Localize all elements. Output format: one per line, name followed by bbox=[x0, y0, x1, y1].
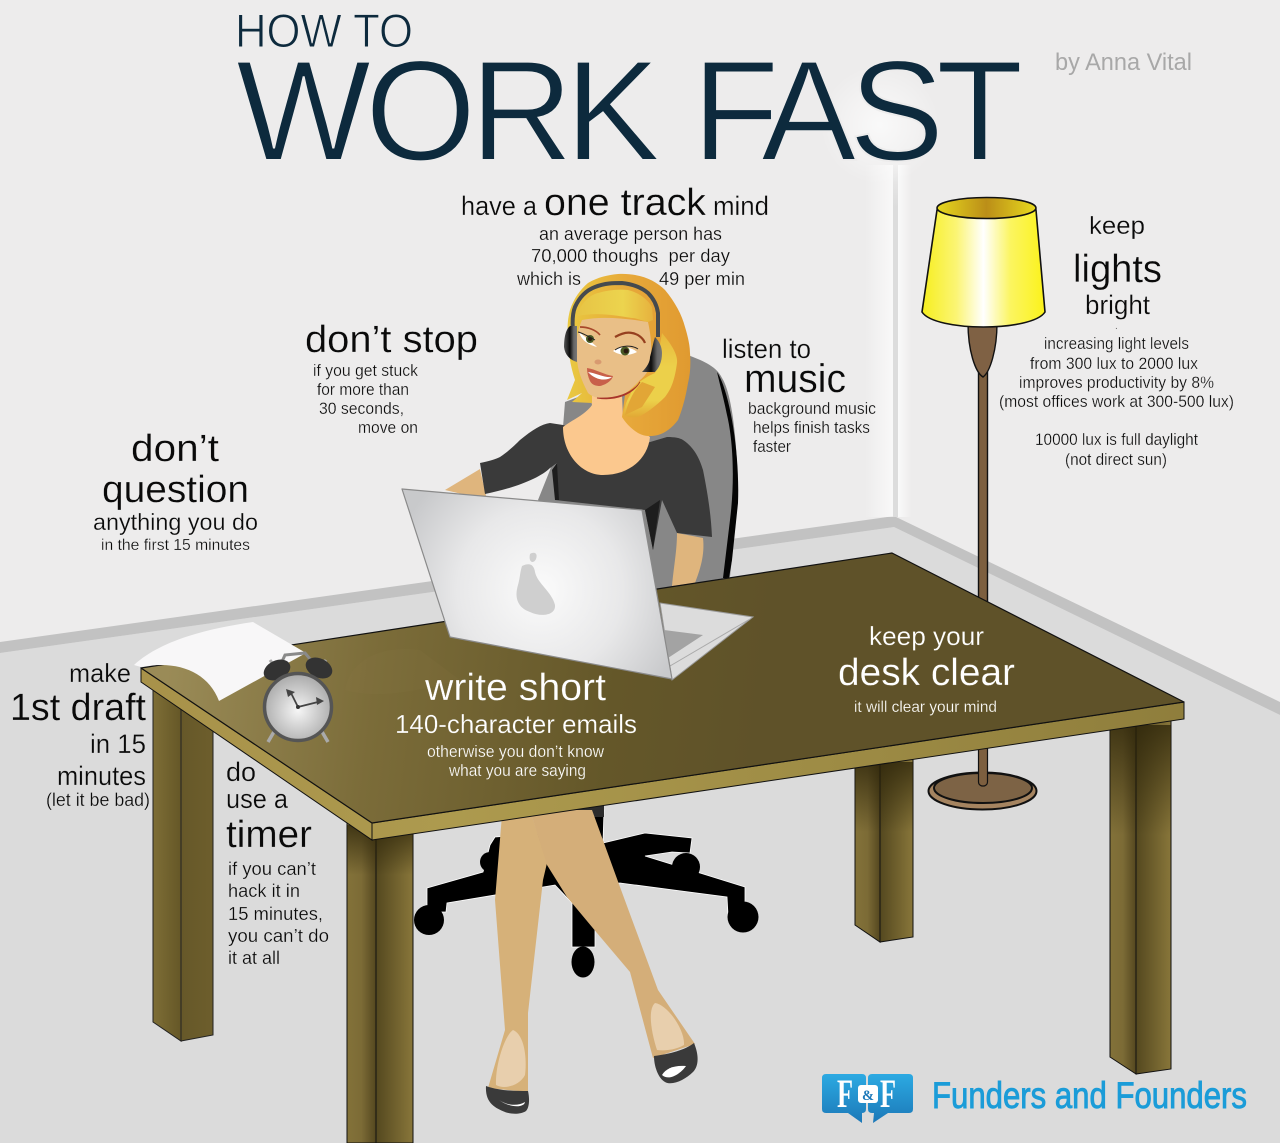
text: keep lights bright: 10000 lux is full daylight bbox=[1035, 431, 1198, 449]
chest bbox=[563, 395, 650, 475]
text: listen to music: background music bbox=[748, 400, 876, 418]
mouth bbox=[587, 368, 613, 386]
right arm bbox=[672, 533, 703, 586]
text: desk clear: keep your bbox=[869, 621, 984, 651]
chair base bbox=[414, 810, 758, 978]
text: use a timer: it at all bbox=[228, 948, 280, 968]
alarm clock bbox=[260, 653, 336, 742]
text: one track mind: mind bbox=[713, 191, 769, 221]
text: use a timer bbox=[226, 757, 329, 968]
laptop lid bbox=[402, 489, 672, 679]
foot highlight right bbox=[651, 1003, 684, 1050]
text: don't stop: don’t stop bbox=[305, 319, 478, 361]
text: keep lights bright: (not direct sun) bbox=[1065, 451, 1167, 469]
table legs bbox=[153, 680, 1171, 1143]
leg: back bbox=[855, 750, 913, 942]
text: write short: what you are saying bbox=[448, 762, 586, 780]
text: keep lights bright: keep bbox=[1089, 212, 1145, 240]
earphone left bbox=[564, 326, 577, 362]
text: write short: write short bbox=[424, 667, 606, 709]
leg: left bbox=[153, 680, 213, 1041]
text: use a timer: you can’t do bbox=[228, 926, 329, 946]
text: one track mind: 70,000 thoughs per day bbox=[531, 245, 731, 266]
text: keep lights bright: bright bbox=[1085, 290, 1150, 320]
text: keep lights bright: from 300 lux to 2000 lux bbox=[1030, 355, 1199, 373]
dress shadow bbox=[552, 463, 660, 550]
text: don't question bbox=[93, 428, 258, 554]
text: keep lights bright: improves productivity by 8% bbox=[1019, 374, 1214, 392]
text: write short: 140-character emails bbox=[395, 709, 637, 739]
text: desk clear: it will clear your mind bbox=[854, 699, 997, 716]
speech bubbles: F bbox=[837, 1071, 853, 1116]
dress bbox=[480, 423, 712, 550]
bangs bbox=[578, 290, 653, 322]
baseboard bbox=[0, 516, 1280, 715]
leg: right bbox=[1110, 715, 1171, 1074]
text: one track mind: one track bbox=[544, 182, 707, 224]
text: use a timer: 15 minutes, bbox=[228, 904, 323, 924]
skirt bbox=[540, 795, 604, 817]
text: keep lights bright: (most offices work at 300-500 lux) bbox=[999, 393, 1234, 411]
text: make 1st draft: minutes bbox=[57, 761, 146, 791]
title: WORK FAST bbox=[236, 32, 1023, 191]
standing leg bbox=[488, 810, 547, 1092]
shoe left bbox=[486, 1086, 529, 1114]
logo: Funders and Founders bbox=[822, 1071, 1247, 1123]
text: listen to music: faster bbox=[753, 438, 791, 456]
text: make 1st draft bbox=[10, 658, 150, 810]
text: make 1st draft: (let it be bad) bbox=[46, 790, 150, 810]
nose bbox=[594, 360, 602, 364]
jaw line bbox=[597, 382, 640, 399]
text: write short bbox=[395, 667, 637, 780]
table top bbox=[141, 553, 1184, 840]
laptop bbox=[402, 489, 753, 680]
shoe right bbox=[654, 1043, 698, 1083]
text: don't question: don’t bbox=[131, 428, 219, 470]
hair bbox=[567, 274, 690, 436]
text: listen to music: listen to bbox=[722, 334, 811, 364]
paper bbox=[134, 622, 306, 701]
hair shadow bbox=[625, 382, 655, 415]
text: don't question: question bbox=[102, 469, 249, 511]
text: use a timer: use a bbox=[226, 784, 289, 814]
speech bubbles: & bbox=[862, 1088, 874, 1104]
text: listen to music: helps finish tasks bbox=[753, 419, 870, 437]
title glow bbox=[820, 65, 940, 185]
title: HOW TO bbox=[235, 4, 413, 57]
lamp base bbox=[928, 740, 1036, 810]
apple logo bbox=[516, 553, 555, 615]
text: listen to music: music bbox=[744, 357, 846, 401]
text: keep lights bright: . bbox=[1115, 321, 1118, 332]
eyes and brows bbox=[578, 327, 645, 356]
woman upper body bbox=[445, 274, 712, 586]
text: use a timer: hack it in bbox=[228, 881, 300, 901]
floor bbox=[0, 527, 1280, 1143]
text: listen to music bbox=[722, 334, 876, 456]
text: use a timer: do bbox=[226, 757, 256, 787]
woman legs bbox=[486, 795, 698, 1114]
foot highlight left bbox=[496, 1030, 526, 1087]
text: desk clear bbox=[838, 621, 1015, 716]
text: make 1st draft: make bbox=[69, 658, 131, 688]
text: one track mind: have a bbox=[461, 191, 538, 221]
text: write short: otherwise you don’t know bbox=[427, 743, 604, 761]
text: don't stop: 30 seconds, bbox=[319, 400, 404, 418]
text: don't question: anything you do bbox=[93, 509, 258, 535]
text: use a timer: if you can’t bbox=[228, 859, 316, 879]
text: one track mind: an average person has bbox=[539, 223, 722, 244]
wall corner bbox=[865, 165, 912, 517]
text: keep lights bright: increasing light levels bbox=[1044, 335, 1189, 353]
hair lock bbox=[623, 333, 677, 417]
speech bubbles: F bbox=[880, 1071, 896, 1116]
text: one track mind bbox=[461, 182, 769, 289]
chair back bbox=[538, 355, 738, 590]
lamp upper bbox=[922, 198, 1045, 610]
text: keep lights bright bbox=[999, 212, 1234, 469]
speech bubbles bbox=[822, 1071, 913, 1123]
text: don't stop: if you get stuck bbox=[313, 362, 419, 380]
laptop keyboard bbox=[664, 630, 703, 658]
text: don't stop: move on bbox=[358, 419, 418, 437]
text: don't question: in the first 15 minutes bbox=[101, 537, 250, 554]
text: don't stop: for more than bbox=[317, 381, 409, 399]
leg: front bbox=[347, 800, 413, 1143]
text: one track mind: which is bbox=[516, 268, 581, 289]
crossed leg bbox=[530, 810, 695, 1058]
text: use a timer: timer bbox=[226, 814, 312, 856]
face bbox=[576, 318, 651, 398]
text: don't stop bbox=[305, 319, 478, 437]
text: make 1st draft: 1st draft bbox=[10, 687, 146, 729]
left arm bbox=[445, 469, 487, 500]
laptop base bbox=[660, 603, 753, 680]
text: desk clear: desk clear bbox=[838, 652, 1015, 694]
text: one track mind: 49 per min bbox=[659, 268, 745, 289]
text: keep lights bright: lights bbox=[1073, 248, 1162, 291]
byline: by Anna Vital bbox=[1055, 49, 1192, 76]
headband bbox=[573, 283, 658, 337]
earphone right bbox=[642, 337, 662, 372]
laptop lip bbox=[670, 619, 750, 666]
text: make 1st draft: in 15 bbox=[90, 729, 146, 759]
